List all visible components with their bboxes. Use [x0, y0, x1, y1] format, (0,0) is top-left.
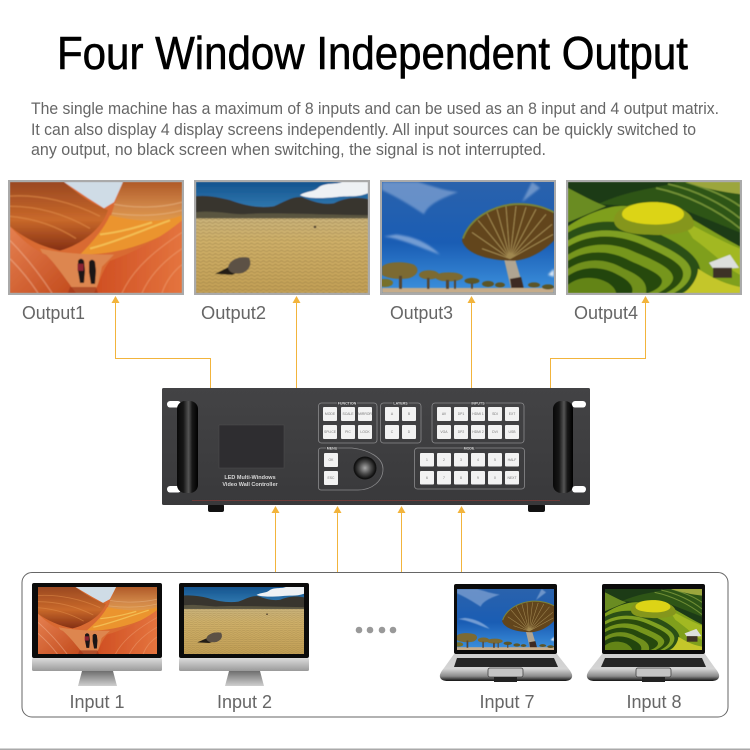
icon: laptop input 8 [587, 584, 719, 682]
button captions: PIC [345, 430, 351, 434]
button captions: AV [442, 412, 447, 416]
device front panel [162, 388, 590, 505]
button captions: HALF [508, 458, 516, 462]
control group titles [327, 402, 485, 450]
button captions: MODE [325, 412, 336, 416]
button captions: SCALE [342, 412, 354, 416]
button captions: 6 [426, 476, 428, 480]
button captions: HDMI 2 [472, 430, 484, 434]
button captions: SPLICE [324, 430, 337, 434]
panel: output images [8, 180, 742, 295]
description text: It can also display 4 display screens independently. All input sources can be quickly switched to [31, 120, 696, 139]
description text: any output, no black screen when switching, the signal is not interrupted. [31, 140, 546, 159]
panel: inputs [22, 572, 728, 717]
button captions: NEXT [507, 476, 517, 480]
button captions: ESC [328, 476, 335, 480]
button captions: SDI [492, 412, 498, 416]
output 1 image [8, 180, 184, 295]
button captions: C [391, 430, 394, 434]
output 2 image [194, 180, 370, 295]
input labels: Input 1 [69, 692, 125, 712]
output labels: Output2 [201, 303, 266, 323]
control group outlines [318, 403, 524, 490]
arrows: inputs to device [272, 506, 466, 572]
icon: laptop input 7 [440, 584, 572, 682]
control group titles: LAYERS [393, 402, 408, 406]
button captions: EXT [509, 412, 515, 416]
red accent line [192, 500, 560, 501]
icon: monitor input 2 [179, 583, 309, 686]
device label [222, 475, 279, 488]
button captions: D [408, 430, 411, 434]
output labels: Output4 [574, 303, 638, 323]
description text [31, 99, 719, 159]
button captions: MIRROR [358, 412, 372, 416]
control group titles: FUNCTION [338, 402, 357, 406]
output labels: Output3 [390, 303, 453, 323]
button captions: A [391, 412, 394, 416]
button captions: VGA [440, 430, 448, 434]
control buttons [323, 407, 519, 485]
input labels: Input 7 [479, 692, 535, 712]
input labels: Input 2 [217, 692, 272, 712]
device: video wall controller [162, 388, 590, 512]
device feet [208, 504, 545, 512]
button captions: LOCK [360, 430, 370, 434]
button captions: DVI [492, 430, 498, 434]
device label: LED Multi-Windows [224, 475, 276, 481]
button captions: 1 [426, 458, 428, 462]
button captions: 2 [443, 458, 445, 462]
button captions: 0 [494, 476, 496, 480]
button captions: OK [329, 458, 334, 462]
left handle [177, 401, 198, 493]
button captions: DP2 [458, 430, 464, 434]
control group titles: INPUTS [471, 402, 485, 406]
output 4 image [566, 180, 742, 295]
output 3 image [377, 180, 556, 295]
button captions: HDMI 1 [472, 412, 484, 416]
icon: monitor input 1 [32, 583, 162, 686]
right handle [553, 401, 573, 493]
control group titles: MODE [464, 446, 475, 450]
device label: Video Wall Controller [222, 482, 279, 488]
arrows: device to outputs [112, 296, 650, 388]
input labels: Input 8 [626, 692, 682, 712]
button captions: B [408, 412, 411, 416]
control group titles: MENU [327, 446, 338, 450]
ellipsis dots [356, 627, 396, 633]
output labels: Output1 [22, 303, 85, 323]
button captions: 9 [477, 476, 479, 480]
LCD screen [219, 425, 284, 468]
mounting holes [167, 401, 586, 492]
button captions: 3 [460, 458, 462, 462]
control knob [354, 457, 376, 479]
button captions: 4 [477, 458, 479, 462]
button captions: 7 [443, 476, 445, 480]
button captions: 8 [460, 476, 462, 480]
button captions: USB [509, 430, 516, 434]
title: Four Window Independent Output [57, 27, 688, 79]
button captions: DP1 [458, 412, 464, 416]
button captions [324, 412, 517, 480]
button captions: 5 [494, 458, 496, 462]
input labels [69, 692, 682, 712]
output labels [22, 303, 638, 323]
